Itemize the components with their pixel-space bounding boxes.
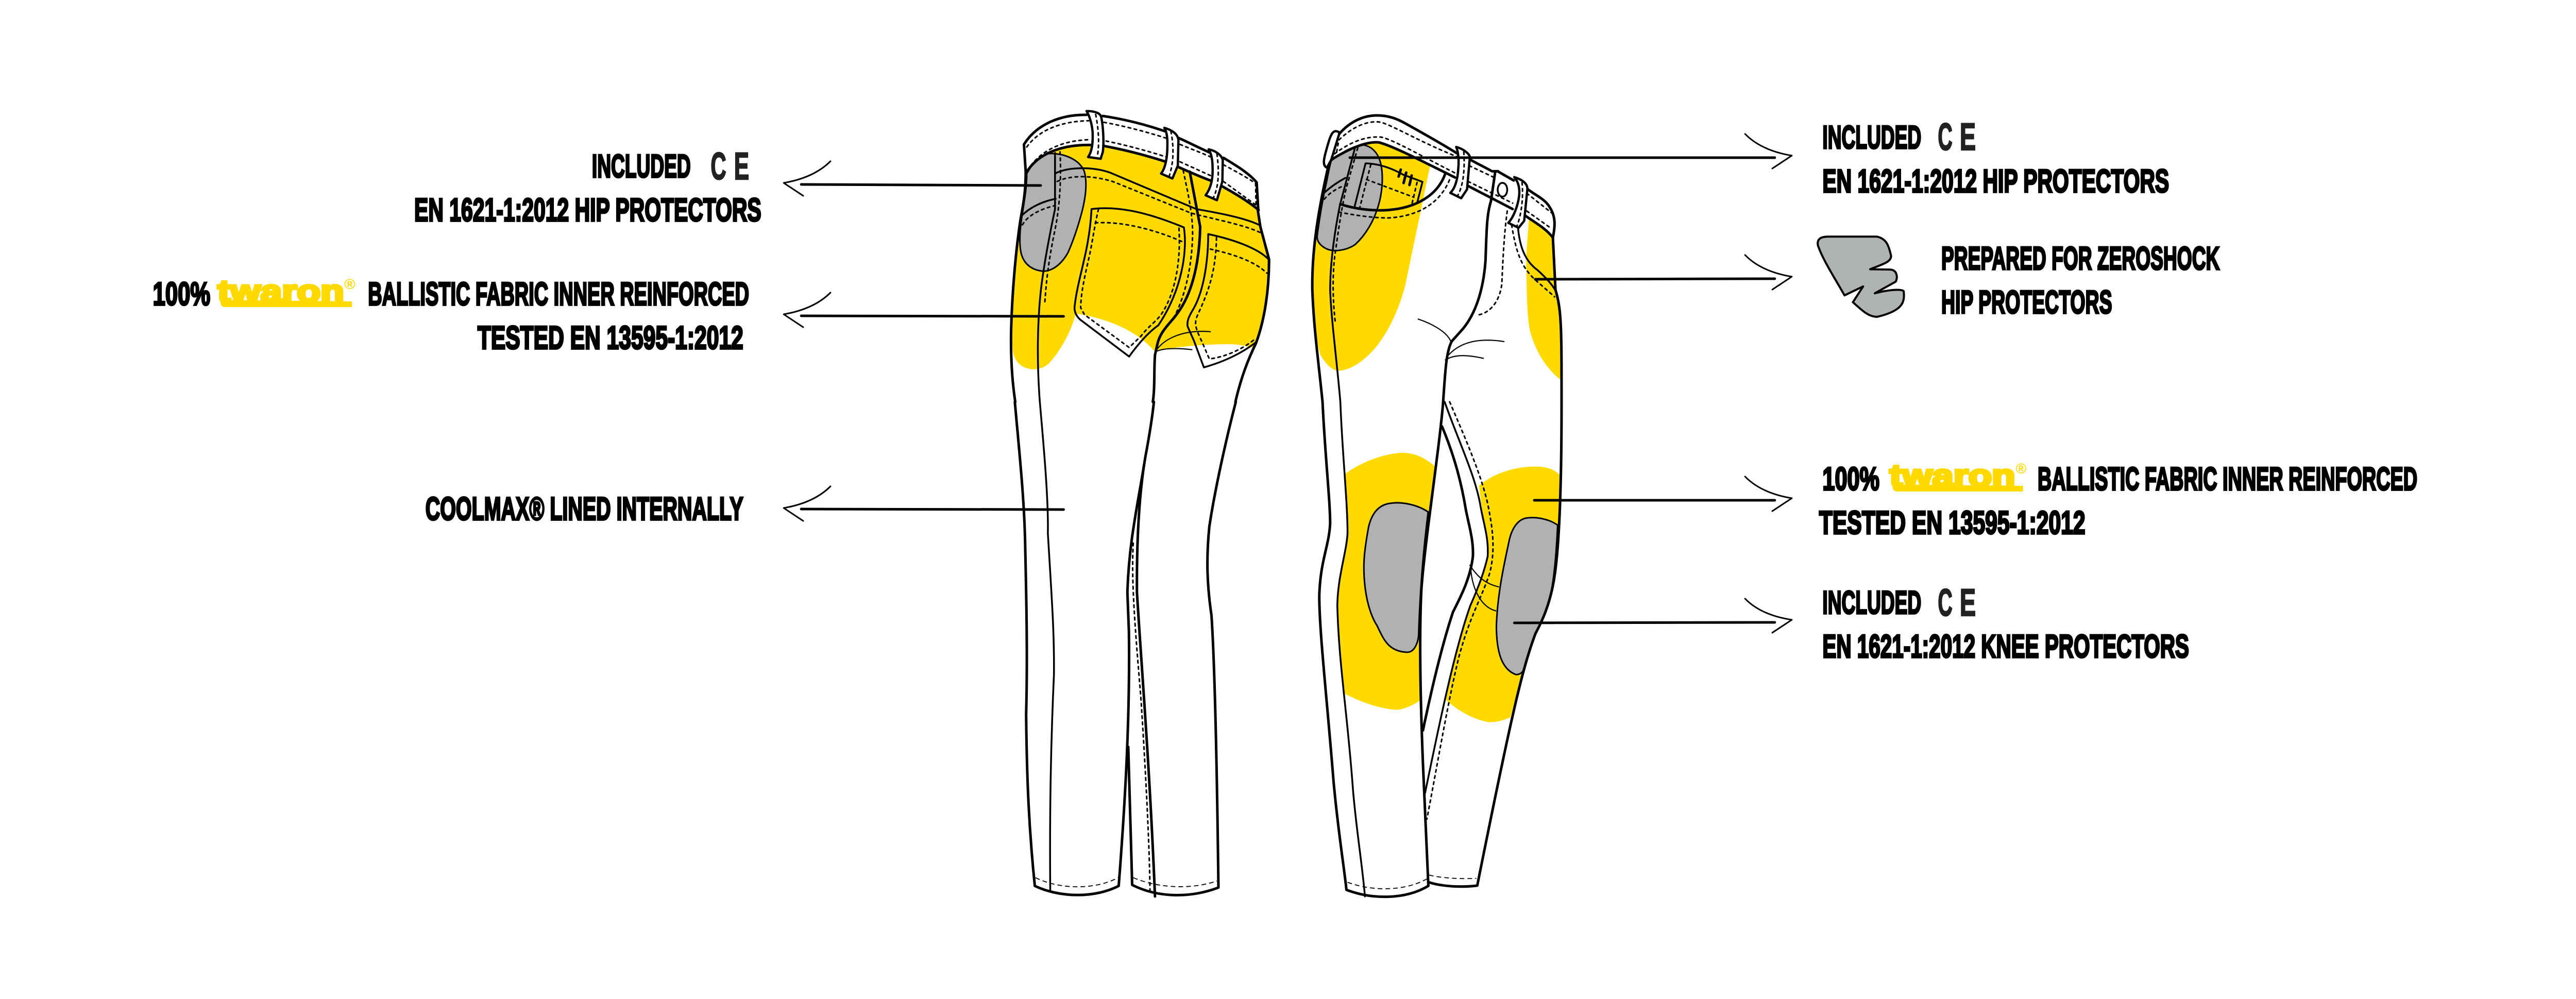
callout: left twaron fabric: [153, 275, 749, 356]
callout: right twaron fabric: TESTED EN 13595-1:2012: [1819, 504, 2086, 541]
wrinkles: [1418, 319, 1504, 360]
callout: zeroshock: HIP PROTECTORS: [1941, 283, 2112, 320]
left back pocket: [1075, 208, 1185, 357]
twaron logo: ®: [344, 276, 355, 292]
side pocket opening: [1512, 225, 1554, 297]
coin pocket: [1354, 163, 1422, 206]
callout: left hip protectors: EN 1621-1:2012 HIP PROTECTORS: [414, 191, 761, 228]
callout: left twaron fabric: TESTED EN 13595-1:2012: [478, 319, 743, 356]
twaron logo: twaron: [1890, 459, 2015, 493]
yellow twaron reinforcement: left knee: [1337, 453, 1434, 710]
callout: right hip protectors: [1822, 116, 2169, 199]
twaron logo: [1890, 459, 2026, 493]
callout: right twaron fabric: BALLISTIC FABRIC INNER REINFORCED: [2038, 460, 2417, 497]
grey hip protector: [1020, 154, 1086, 271]
yoke seams: [1056, 168, 1260, 225]
waistband lines: [1024, 115, 1258, 209]
back view lower legs: [1015, 402, 1236, 896]
callout: right twaron fabric: [1819, 459, 2417, 541]
arrow: zeroshock: [1535, 255, 1792, 290]
front view lower legs with knee zones: [1319, 402, 1562, 897]
callout: left twaron fabric: 100%: [153, 275, 210, 312]
grey knee protector, far leg: [1364, 503, 1428, 652]
twaron logo: ®: [2016, 460, 2026, 477]
right back pocket: [1188, 234, 1268, 367]
twaron logo: twaron: [217, 275, 344, 309]
CE mark: E: [1960, 116, 1976, 158]
callout: knee protectors: EN 1621-1:2012 KNEE PROTECTORS: [1822, 628, 2189, 665]
arrow: left twaron: [784, 293, 1063, 327]
grey knee protector, near leg: [1496, 518, 1557, 674]
front pocket curve: [1341, 174, 1445, 210]
CE mark: E: [1960, 582, 1976, 624]
callout: left hip protectors: INCLUDED: [592, 147, 691, 184]
CE mark: C: [1938, 582, 1953, 624]
callout: right hip protectors: EN 1621-1:2012 HIP PROTECTORS: [1822, 162, 2169, 199]
callout: knee protectors: INCLUDED: [1822, 584, 1921, 621]
front view upper: waistband, pocket and reinforcement: [1312, 115, 1562, 402]
callout: zeroshock: PREPARED FOR ZEROSHOCK: [1941, 240, 2219, 277]
front three-quarter view of the jeans: [1312, 115, 1562, 897]
CE mark: C: [710, 145, 726, 188]
arrow: right twaron: [1534, 477, 1792, 511]
fly and button: [1443, 171, 1498, 402]
silhouette: [1553, 238, 1562, 402]
yellow twaron reinforcement: outer hip: [1312, 142, 1430, 371]
yellow twaron reinforcement: inner hip: [1526, 219, 1561, 380]
CE mark: [1938, 116, 1976, 158]
waistband lines: [1336, 115, 1554, 238]
yellow twaron reinforcement: right knee: [1445, 467, 1561, 722]
arrow: coolmax: [784, 486, 1063, 521]
grey hip protector: [1317, 145, 1382, 250]
callout: left hip protectors: [414, 145, 761, 228]
callout: right hip protectors: INCLUDED: [1822, 118, 1921, 156]
twaron logo: [217, 275, 355, 309]
belt loops: [1450, 147, 1470, 198]
side belt loop: [1324, 131, 1339, 167]
CE mark: [1938, 582, 1976, 624]
belt loops: [1087, 111, 1104, 159]
CE mark: [710, 145, 749, 188]
arrow: left hip protector: [784, 161, 1041, 196]
callout: zeroshock: [1941, 240, 2219, 320]
callout: knee protectors: [1822, 582, 2189, 665]
yoke: [1325, 178, 1345, 192]
right silhouette: [1235, 210, 1269, 402]
yellow twaron reinforcement: seat: [1011, 145, 1269, 369]
CE mark: E: [734, 145, 749, 188]
back view upper: waistband, pockets and reinforcement: [1011, 111, 1269, 402]
centre seam: [1153, 172, 1200, 402]
leg outlines: [1319, 402, 1443, 897]
callout: coolmax: COOLMAX® LINED INTERNALLY: [426, 490, 743, 527]
back view of the jeans: [1011, 111, 1269, 896]
CE mark: C: [1938, 116, 1953, 158]
outer silhouette: [1011, 172, 1026, 402]
callout: left twaron fabric: BALLISTIC FABRIC INNER REINFORCED: [368, 275, 749, 312]
arrow: right hip protector: [1350, 134, 1792, 168]
callout: right twaron fabric: 100%: [1822, 460, 1879, 497]
arrow: knee protector: [1514, 599, 1792, 633]
icon: zeroshock hip protector: [1818, 236, 1904, 317]
